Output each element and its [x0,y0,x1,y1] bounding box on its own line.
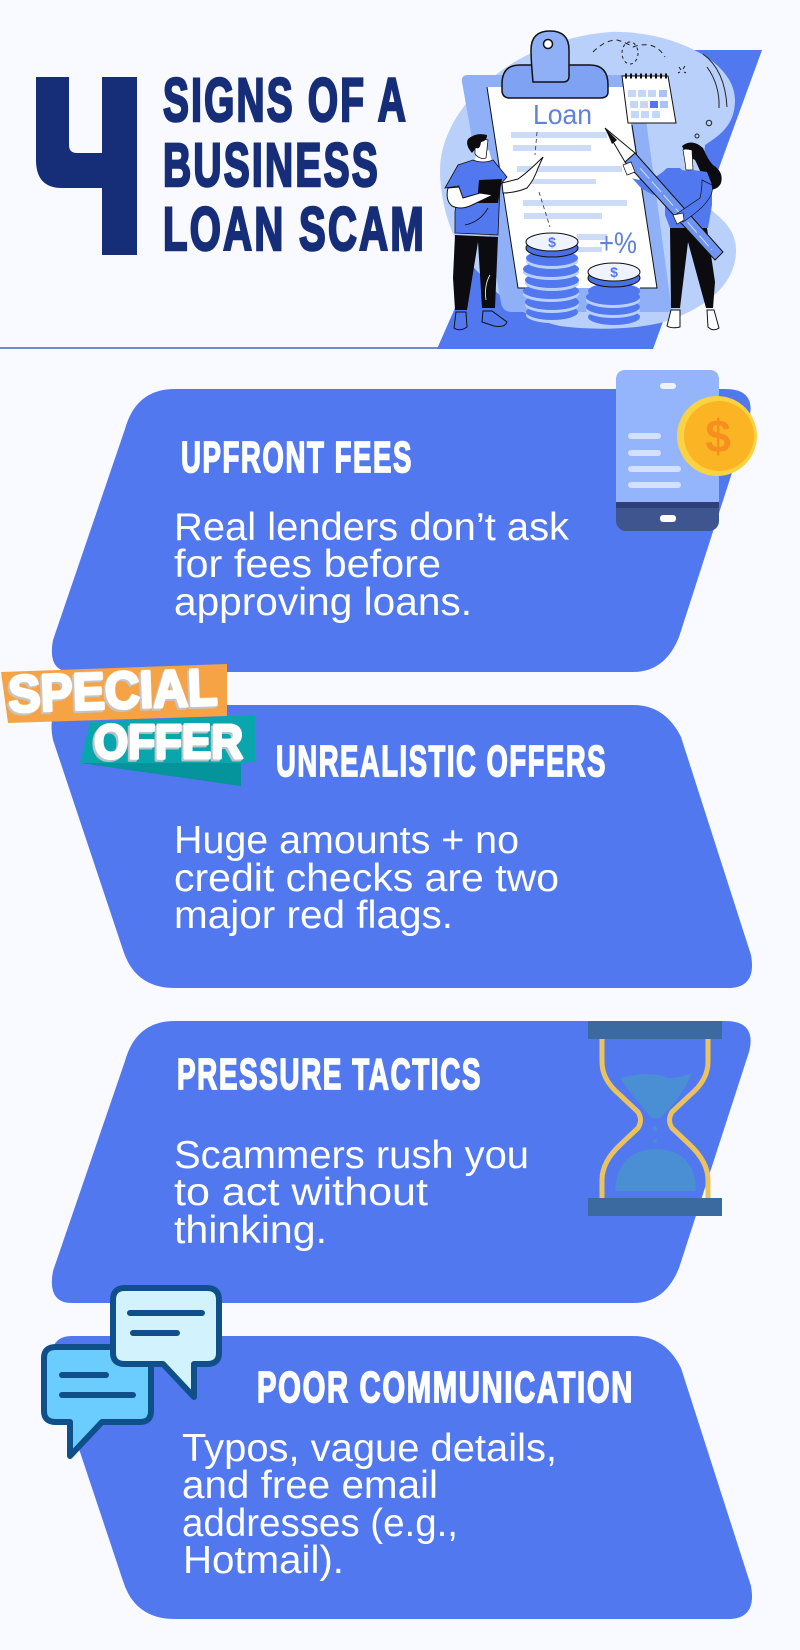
body text: addresses (e.g., [182,1502,458,1545]
body text: Typos, vague details, [182,1427,557,1470]
heading: UNREALISTIC OFFERS [276,737,607,786]
woman figure [605,128,723,330]
panel: pressure tactics [52,1021,751,1303]
big numeral 4 [36,77,137,255]
illustration: loan clipboard with two people: +% [599,227,637,260]
body text: Hotmail). [183,1539,344,1582]
coin stacks: $ [610,264,618,280]
icon: phone with coin: $ [705,410,731,462]
body text [174,1134,529,1252]
illustration: loan clipboard with two people: Loan [533,99,592,130]
clipboard lines [511,132,627,252]
title [163,66,426,263]
calendar [622,76,676,123]
badge: special offer [1,659,255,786]
icon: phone with coin [616,370,757,531]
coin stacks: $ [548,234,556,250]
panel: poor communication [52,1336,752,1619]
coin stacks [523,233,640,328]
clipboard clip [502,31,608,98]
title: LOAN SCAM [163,195,426,263]
icon: chat bubbles [44,1288,219,1456]
badge: special offer: OFFER [94,716,243,769]
body text: for fees before [174,543,441,586]
body text: to act without [174,1171,428,1214]
illustration: loan clipboard with two people [437,31,762,349]
title: BUSINESS [163,131,380,199]
man figure [445,134,543,330]
body text: and free email [182,1464,438,1507]
heading: UPFRONT FEES [181,433,413,482]
title: SIGNS OF A [163,66,408,134]
body text [174,506,570,624]
body text: Huge amounts + no [174,819,519,862]
heading: PRESSURE TACTICS [177,1050,482,1099]
body text: Scammers rush you [174,1134,529,1177]
body text [182,1427,557,1582]
panel: upfront fees [52,389,751,672]
panel: unrealistic offers [52,705,752,988]
body text: major red flags. [174,894,453,937]
body text: credit checks are two [174,857,559,900]
body text: approving loans. [174,581,472,624]
body text: Real lenders don’t ask [174,506,570,549]
icon: hourglass [588,1021,722,1216]
body text [174,819,559,937]
badge: special offer: SPECIAL [7,659,218,724]
body text: thinking. [174,1209,327,1252]
decorative swirls [593,40,727,138]
